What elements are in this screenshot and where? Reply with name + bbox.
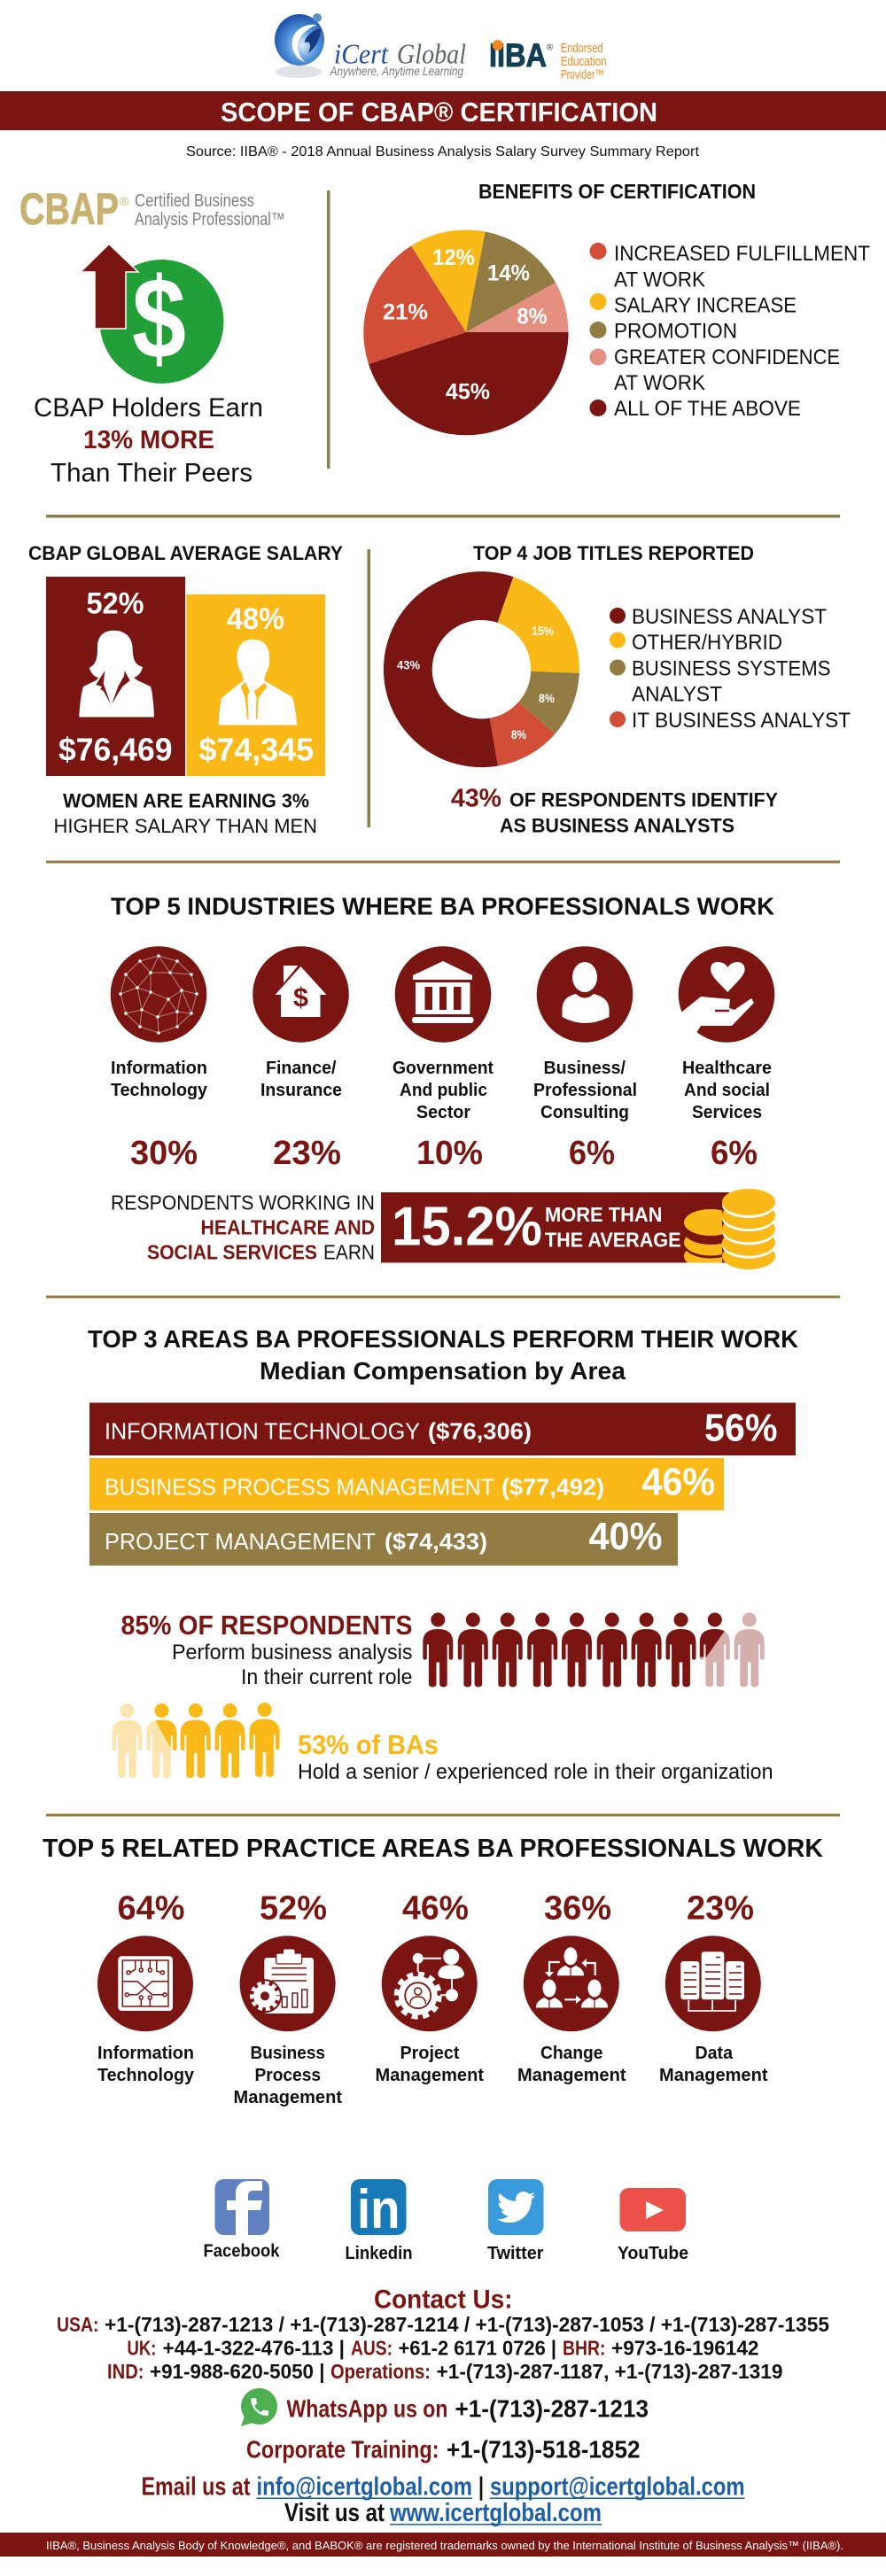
industry: healthcare: Healthcare [682,1059,772,1078]
practice: information technology: 64% [117,1890,184,1928]
heading: TOP 5 INDUSTRIES WHERE BA PROFESSIONALS WORK [111,893,774,919]
callout: 43% business analysts: 43% [451,785,501,813]
website line: www.icertglobal.com [389,2499,602,2527]
iCert Global wordmark: Anywhere, Anytime Learning [330,64,463,78]
bar: project management: 40% [588,1515,663,1558]
iCert Global wordmark [330,37,466,78]
panel: benefits of certification [363,180,870,435]
pie chart: 8% [517,305,548,330]
source line: Source: IIBA® - 2018 Annual Business Analysis Salary Survey Summary Report [186,144,700,159]
phone line: IND Operations [107,2360,783,2383]
bar: information technology: 56% [704,1407,778,1449]
email line [142,2473,744,2502]
industry: business consulting: Consulting [540,1103,629,1122]
email line: support@icertglobal.com [490,2473,744,2502]
CBAP logo: ® [120,194,129,208]
pie chart [363,229,569,435]
footer band [0,2533,886,2557]
icon: dollar coin with up arrow: $ [132,253,186,383]
practice: business process management [234,1890,342,2107]
bar: business process management: 46% [641,1460,715,1504]
icon: woman [79,631,154,718]
donut chart: 43% [397,657,421,671]
CBAP logo: Analysis Professional™ [135,210,285,229]
callout: healthcare earnings text: RESPONDENTS WORKING IN [111,1191,375,1214]
legend: SALARY INCREASE [614,294,797,317]
IIBA logo: ® [547,43,554,53]
phone line: UK AUS BHR [128,2337,758,2360]
whatsapp line [241,2388,649,2426]
website line [284,2499,602,2527]
callout: women earn more: HIGHER SALARY THAN MEN [53,815,317,837]
icon: twitter [487,2179,544,2263]
icon: facebook: Facebook [204,2241,280,2261]
panel: top 3 areas [88,1325,798,1784]
legend: GREATER CONFIDENCE [614,345,840,369]
industry: information technology [111,946,208,1172]
legend: BUSINESS ANALYST [632,605,827,629]
practice: business process management: Management [234,2088,342,2107]
panel: top 5 industries [111,893,775,1269]
industry: finance: 23% [273,1135,341,1172]
donut chart: 8% [511,727,526,741]
bar: men: $74,345 [198,732,314,767]
icon: whatsapp [241,2388,277,2426]
whatsapp line: WhatsApp us on [287,2395,448,2422]
title band: SCOPE OF CBAP® CERTIFICATION [221,97,657,128]
phone line: USA: +1-(713)-287-1213 / +1-(713)-287-1214 / +1-(713)-287-1053 / +1-(713)-287-1355 [105,2313,829,2336]
title band [0,91,886,130]
callout: women earn more [53,790,317,837]
phone line: UK AUS BHR: BHR: [563,2337,606,2360]
bar: information technology [89,1403,796,1455]
IIBA logo: Education [561,54,607,69]
callout: 13% more [34,393,263,487]
corporate training line [246,2436,640,2463]
legend: BUSINESS SYSTEMS [632,657,831,680]
heading: CBAP GLOBAL AVERAGE SALARY [28,542,343,564]
panel: global average salary [28,542,343,837]
CBAP logo [19,184,285,234]
bar: business process management: ($77,492) [501,1474,604,1501]
IIBA logo: Endorsed [561,41,603,56]
icon: linkedin [346,2179,413,2263]
IIBA logo [489,37,607,82]
icon: youtube: YouTube [618,2244,688,2263]
heading: Median Compensation by Area [260,1357,626,1385]
callout: healthcare earnings text [111,1191,375,1263]
callout: healthcare earnings text: HEALTHCARE AND [200,1215,375,1238]
practice: project management: 46% [402,1890,469,1928]
legend [610,605,851,733]
legend [590,242,870,421]
corporate training line: Corporate Training: [246,2436,439,2463]
bar: business process management [89,1458,724,1510]
bar: women: 52% [87,586,144,620]
heading: BENEFITS OF CERTIFICATION [478,180,756,203]
bar: business process management: BUSINESS PROCESS MANAGEMENT [105,1474,494,1501]
industry: business consulting: Professional [533,1081,637,1100]
legend: ALL OF THE ABOVE [614,397,801,421]
phone line: UK AUS BHR: +973-16-196142 [611,2337,758,2360]
phone line: IND Operations: +1-(713)-287-1187, +1-(713)-287-1319 [436,2360,783,2383]
website line: Visit us at [284,2499,385,2527]
phone line: IND Operations: Operations: [330,2360,431,2383]
bar: information technology: ($76,306) [428,1417,532,1444]
callout: 15.2% banner [381,1189,775,1269]
header logos [275,13,607,82]
legend: INCREASED FULFILLMENT [614,242,870,266]
practice: change management: Management [517,2066,626,2085]
bar: project management [89,1513,678,1566]
icon: iCert Global swirl [275,13,324,78]
phone line: UK AUS BHR: +61-2 6171 0726 | [399,2337,556,2360]
icon: linkedin: in [357,2179,400,2240]
practice: information technology [97,1890,195,2085]
industry: healthcare: Services [692,1103,762,1122]
industry: government: 10% [416,1135,483,1172]
callout: healthcare earnings text: SOCIAL SERVICES [147,1240,317,1263]
panel: CBAP holders earn more [19,184,285,487]
industry: finance [253,946,349,1172]
practice: data management [659,1890,768,2085]
heading [88,1325,798,1385]
industry: information technology: Information [111,1059,207,1078]
CBAP logo: CBAP [19,184,119,234]
stat: 85% of respondents [120,1610,413,1689]
practice: change management: Change [540,2044,602,2063]
pictogram: red people [423,1612,765,1687]
pie chart: 14% [487,260,530,285]
stat: 53% of BAs [298,1729,773,1784]
heading: contact us: Contact Us: [374,2285,512,2314]
callout: 13% more: Than Their Peers [51,459,253,487]
icon: linkedin: Linkedin [346,2244,413,2263]
legend: AT WORK [614,371,705,395]
bar: men [186,594,325,776]
pie chart: 45% [446,379,490,404]
email line: info@icertglobal.com [257,2473,472,2502]
icon: man [219,640,297,725]
callout: 13% more: 13% MORE [83,426,214,454]
bar: men: 48% [227,602,284,636]
iCert Global wordmark: iCert [334,37,389,69]
callout: 43% business analysts: OF RESPONDENTS IDENTIFY [509,788,778,811]
practice: data management: 23% [687,1890,754,1928]
callout: 15.2% banner: 15.2% [392,1196,542,1258]
practice: change management: 36% [544,1890,611,1928]
IIBA logo: Provider™ [561,67,604,82]
heading: TOP 4 JOB TITLES REPORTED [473,542,754,564]
panel: top 5 related practice areas [43,1835,823,2107]
industry: healthcare: And social [684,1081,770,1100]
legend: PROMOTION [614,319,737,344]
social links [204,2179,688,2263]
callout: 43% business analysts: AS BUSINESS ANALYSTS [500,815,734,836]
email line: | [478,2473,484,2502]
stat: 53% of BAs: Hold a senior / experienced role in their organization [298,1760,773,1784]
callout: 13% more: CBAP Holders Earn [34,393,263,423]
corporate training line: +1-(713)-518-1852 [447,2436,640,2463]
industry: information technology: 30% [130,1135,198,1172]
industry: healthcare [673,946,774,1172]
icon: facebook [204,2179,280,2261]
industry: information technology: Technology [111,1081,208,1100]
practice: business process management: 52% [260,1890,327,1928]
industry: business consulting: Business/ [544,1059,626,1078]
industry: business consulting: 6% [569,1135,615,1172]
phone line: UK AUS BHR: +44-1-322-476-113 | [163,2337,345,2360]
bar: women [46,577,185,776]
donut chart: 15% [532,624,554,638]
industry: government [392,946,494,1172]
legend: ANALYST [632,682,722,707]
stat: 85% of respondents: 85% OF RESPONDENTS [120,1610,413,1641]
practice: project management [376,1890,484,2085]
phone line: USA: USA: [57,2313,99,2336]
industry: government: And public [400,1081,487,1100]
bar: women: $76,469 [58,732,172,767]
donut chart: 8% [539,691,555,705]
industry: government: Government [392,1059,494,1078]
phone line: UK AUS BHR: UK: [128,2337,156,2360]
practice: business process management: Business [250,2044,325,2063]
pictogram: yellow people [112,1703,280,1778]
iCert Global wordmark: Global [397,37,466,69]
industry: healthcare: 6% [711,1135,758,1172]
callout: healthcare earnings text: EARN [323,1240,375,1263]
industry: business consulting [533,946,637,1172]
practice: data management: Management [659,2066,768,2085]
practice: data management: Data [695,2044,734,2063]
practice: information technology: Technology [97,2066,195,2085]
callout: 43% business analysts [451,785,778,836]
icon: coin stacks [684,1189,775,1269]
industry: government: Sector [416,1103,470,1122]
stat: 85% of respondents: Perform business analysis [172,1641,413,1664]
legend: OTHER/HYBRID [632,631,782,655]
bar: project management: ($74,433) [385,1528,487,1555]
legend: IT BUSINESS ANALYST [632,709,851,733]
stat: 53% of BAs: 53% of BAs [298,1729,439,1760]
pie chart: 12% [432,245,475,270]
practice: business process management: Process [255,2066,321,2085]
legend: AT WORK [614,268,705,292]
email line: Email us at [142,2473,251,2502]
stat: 85% of respondents: In their current role [241,1665,413,1689]
callout: women earn more: WOMEN ARE EARNING 3% [63,790,309,811]
callout: 15.2% banner: MORE THAN [545,1203,663,1226]
pie chart: 21% [383,299,428,324]
heading: TOP 5 RELATED PRACTICE AREAS BA PROFESSIONALS WORK [43,1835,823,1863]
phone line: IND Operations: IND: [107,2360,144,2383]
donut chart [384,571,579,767]
panel: top 4 job titles [384,542,851,836]
bar: information technology: INFORMATION TECHNOLOGY [105,1417,420,1444]
industry: finance: $ [293,982,308,1013]
footer band: IIBA®, Business Analysis Body of Knowledge®, and BABOK® are registered trademarks owned by the International Institute of Business Analysis™ (IIBA®). [46,2539,843,2552]
contact block [57,2285,829,2527]
icon: youtube [618,2188,688,2263]
whatsapp line: +1-(713)-287-1213 [455,2395,649,2422]
bar: project management: PROJECT MANAGEMENT [105,1528,376,1555]
IIBA logo: IIBA [489,37,547,74]
practice: project management: Project [400,2044,460,2063]
industry: finance: Insurance [260,1081,342,1100]
icon: twitter: Twitter [487,2244,544,2263]
icon: dollar coin with up arrow [81,244,223,384]
industry: finance: Finance/ [266,1059,337,1078]
practice: project management: Management [376,2066,484,2085]
callout: 15.2% banner: THE AVERAGE [545,1228,680,1251]
phone line: UK AUS BHR: AUS: [351,2337,392,2360]
practice: change management [517,1890,626,2085]
heading: TOP 3 AREAS BA PROFESSIONALS PERFORM THEIR WORK [88,1325,798,1353]
practice: information technology: Information [97,2044,194,2063]
CBAP logo: Certified Business [135,191,254,211]
phone line: IND Operations: +91-988-620-5050 | [150,2360,324,2383]
